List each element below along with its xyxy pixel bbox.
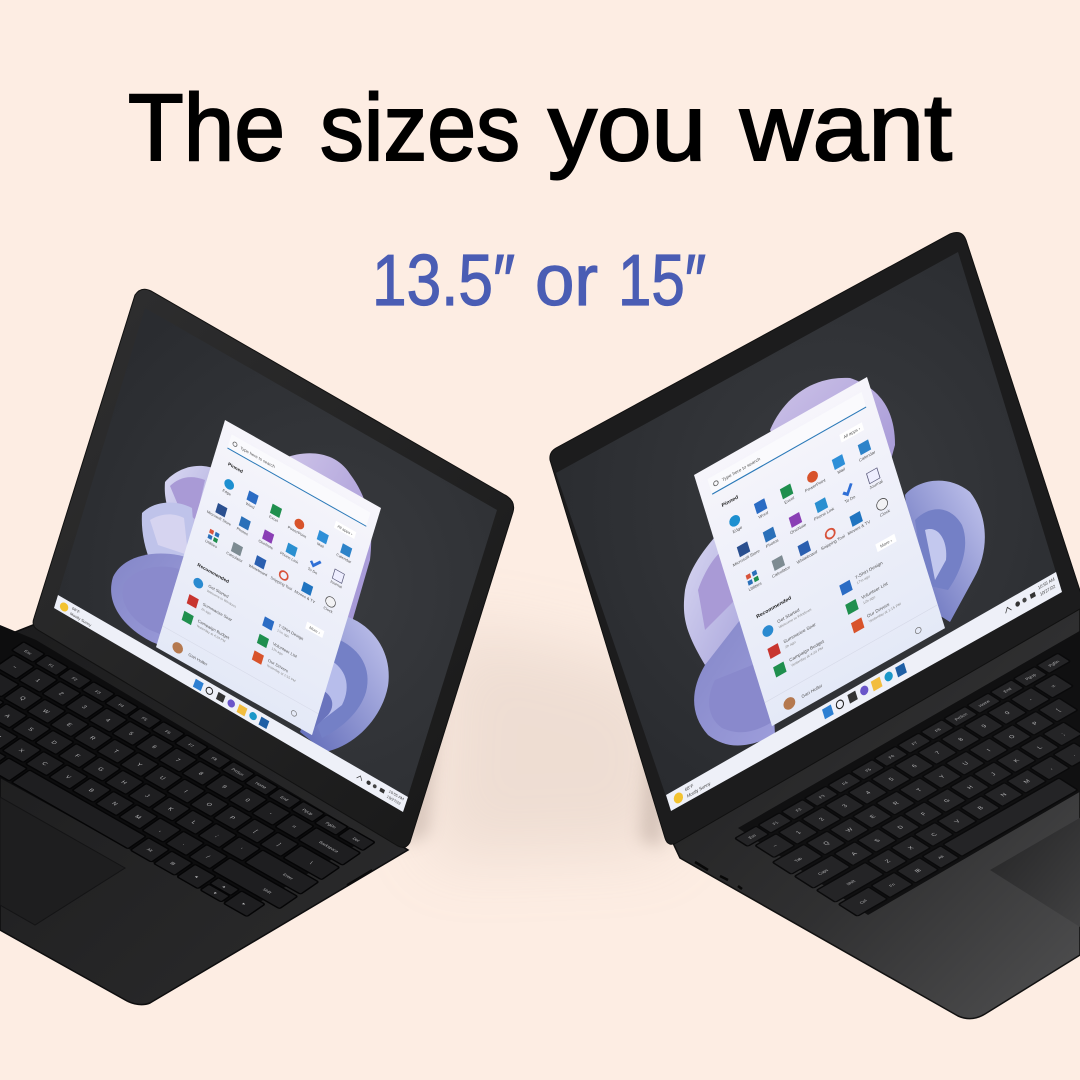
right start menu: Word xyxy=(758,510,769,520)
left keyboard: PgUp xyxy=(301,808,315,816)
right side ports xyxy=(695,862,742,889)
left keyboard: F xyxy=(73,754,81,759)
left keyboard: / xyxy=(204,855,211,860)
right start menu: Movies & TV xyxy=(847,519,871,536)
right keyboard: Shift xyxy=(845,879,857,886)
left keyboard: 6 xyxy=(150,745,158,750)
right start menu: Gari Huller xyxy=(801,683,823,699)
right start menu: 2h ago xyxy=(785,640,796,649)
right keyboard: Alt xyxy=(937,854,946,860)
right keyboard: I xyxy=(986,748,993,752)
left keyboard: ' xyxy=(237,847,243,851)
right keyboard: O xyxy=(1008,734,1017,740)
right start menu: Yesterday at 4:24 PM xyxy=(790,646,824,668)
left keyboard: K xyxy=(166,807,174,812)
right keyboard: 6 xyxy=(911,764,919,769)
right keyboard: F5 xyxy=(864,767,873,773)
left keyboard: Esc xyxy=(23,649,33,655)
right start menu: Welcome to Windows xyxy=(778,607,812,629)
right keyboard: 1 xyxy=(795,831,803,835)
right start menu: Microsoft Store xyxy=(732,548,761,568)
left keyboard: H xyxy=(119,780,128,786)
left keyboard: 5 xyxy=(127,732,134,736)
left keyboard: End xyxy=(279,795,290,802)
right start menu: All apps › xyxy=(843,426,861,440)
right keyboard well xyxy=(738,625,1080,915)
left start menu: Microsoft Store xyxy=(206,509,232,527)
left keyboard: ◄ xyxy=(193,874,200,879)
left start menu: Whiteboard xyxy=(248,563,268,577)
left keyboard: F8 xyxy=(210,756,219,762)
left start menu: Photos xyxy=(236,526,249,537)
right keyboard: Q xyxy=(822,841,832,846)
left start menu: Campaign Budget xyxy=(197,618,231,641)
left trackpad xyxy=(0,797,125,925)
right start menu: Yesterday at 1:15 PM xyxy=(868,602,901,624)
right start menu: Whiteboard xyxy=(796,549,818,565)
right keyboard: D xyxy=(897,825,905,830)
left keyboard: F5 xyxy=(140,716,149,722)
left start menu: Welcome to Windows xyxy=(206,589,237,609)
left start menu: All apps › xyxy=(337,524,354,537)
left start menu: Excel xyxy=(269,514,279,523)
left keyboard: P xyxy=(228,816,236,821)
left keyboard: 1 xyxy=(33,678,41,683)
right deck xyxy=(673,605,1080,1019)
right keyboard: Ctrl xyxy=(858,899,868,905)
left keyboard: , xyxy=(158,829,164,833)
right keyboard: 0 xyxy=(1004,711,1012,716)
left wallpaper flower xyxy=(111,453,389,752)
right keyboard: Home xyxy=(977,699,992,708)
right keyboard: S xyxy=(874,838,882,844)
left keyboard: \ xyxy=(307,861,314,866)
right keyboard: B xyxy=(977,806,985,811)
right keyboard: C xyxy=(930,832,939,838)
title: want xyxy=(739,75,952,181)
right start menu: Recommended xyxy=(756,595,792,620)
left keyboard: S xyxy=(26,727,35,732)
title xyxy=(128,75,952,181)
left keyboard: R xyxy=(88,736,96,741)
left start menu: PowerPoint xyxy=(287,524,308,540)
right keyboard: . xyxy=(1071,753,1077,757)
right keyboard: Tab xyxy=(793,856,804,863)
left side ports xyxy=(347,870,372,885)
right keyboard: 4 xyxy=(865,790,873,795)
right start menu: Pinned xyxy=(721,494,739,509)
left keyboard: ▤ xyxy=(169,861,177,866)
right start menu: PowerPoint xyxy=(804,477,827,493)
subtitle: sizes xyxy=(372,241,706,321)
right start menu: 17m ago xyxy=(856,574,871,585)
right keyboard: L xyxy=(1036,745,1045,750)
left keyboard: 8 xyxy=(197,771,204,776)
left taskbar content: Mostly Sunny xyxy=(69,611,92,628)
left start menu: Calendar xyxy=(336,552,352,565)
left keyboard: PrtScn xyxy=(230,767,246,777)
left start menu: Clock xyxy=(323,605,333,614)
left start menu: Word xyxy=(245,501,255,510)
left keyboard: B xyxy=(87,788,95,793)
right start menu xyxy=(694,377,945,726)
left keyboard: F4 xyxy=(117,703,126,708)
left keyboard: G xyxy=(96,767,105,773)
right keyboard: Esc xyxy=(747,833,757,840)
right start menu: Get Started xyxy=(777,607,800,624)
right keyboard: A xyxy=(851,852,859,857)
title: The xyxy=(128,75,285,181)
right keyboard: F4 xyxy=(841,780,850,786)
right taskbar content: 10/27/22 xyxy=(1039,583,1056,597)
subtitle: sizes: 15″ xyxy=(618,241,706,321)
left keyboard: N xyxy=(110,801,118,807)
right start menu: Excel xyxy=(784,495,795,505)
left keyboard: ▲ xyxy=(221,884,228,889)
left keyboard: E xyxy=(65,723,73,728)
right start menu: More › xyxy=(880,537,893,549)
left start menu: Pinned xyxy=(227,461,243,475)
right keyboard: ; xyxy=(1060,732,1067,737)
left start menu: Utilities xyxy=(205,538,218,549)
right keyboard: F2 xyxy=(794,807,803,812)
left start menu: Snipping Tool xyxy=(270,575,293,592)
left keyboard: X xyxy=(17,748,25,754)
right keyboard: K xyxy=(1013,759,1021,764)
right keyboard: H xyxy=(966,785,975,790)
right start menu: Photos xyxy=(765,538,779,549)
left start menu xyxy=(156,420,381,735)
left keyboard: F7 xyxy=(187,743,196,748)
right keyboard: F7 xyxy=(910,740,919,746)
right taskbar content: 10:55 AM xyxy=(1037,576,1055,591)
right keyboard: 5 xyxy=(888,777,896,782)
right keyboard: F3 xyxy=(818,794,827,799)
right keyboard: PgUp xyxy=(1024,673,1038,681)
right start menu: Journal xyxy=(869,479,883,490)
left keyboard: O xyxy=(204,802,213,808)
left keyboard: Backspace xyxy=(318,840,341,854)
subtitle: sizes: or xyxy=(535,241,598,321)
left start menu: Get Started xyxy=(208,583,230,599)
left keyboard: Home xyxy=(254,781,269,790)
right start menu: Summarize Sear xyxy=(783,622,817,644)
right wallpaper flower xyxy=(684,378,985,746)
left keyboard: 3 xyxy=(80,705,88,710)
right keyboard xyxy=(735,653,1080,916)
left lid xyxy=(33,289,514,847)
left start menu: Phone Link xyxy=(280,550,299,565)
left keyboard: Alt xyxy=(146,847,155,853)
right start menu: Our Drivers xyxy=(866,601,890,619)
right taskbar content: Mostly Sunny xyxy=(686,780,712,799)
left keyboard: - xyxy=(267,812,274,816)
left start menu: Edge xyxy=(222,488,232,497)
left keyboard: C xyxy=(40,761,48,767)
right keyboard: U xyxy=(962,761,970,766)
right keyboard: PgDn xyxy=(1047,659,1061,668)
right keyboard: Caps xyxy=(817,868,829,876)
left start menu: Mail xyxy=(316,541,325,549)
left keyboard: T xyxy=(111,749,120,755)
left keyboard: F6 xyxy=(164,729,173,735)
right keyboard: X xyxy=(907,846,916,851)
left keyboard: 4 xyxy=(103,718,112,724)
title: you xyxy=(548,75,706,181)
left start menu: Recommended xyxy=(197,562,230,585)
right keyboard: V xyxy=(954,819,962,824)
left keyboard: Enter xyxy=(282,872,295,881)
right start menu: To Do xyxy=(844,494,856,504)
right keyboard: 8 xyxy=(958,737,965,742)
left keyboard: U xyxy=(158,776,166,781)
right start menu: Clock xyxy=(879,507,891,518)
right keyboard: F8 xyxy=(934,727,943,733)
left start menu: Summarize Sear xyxy=(202,602,233,623)
left keyboard: ~ xyxy=(10,665,18,670)
right start menu: 12h ago xyxy=(863,595,876,605)
right keyboard: N xyxy=(1000,792,1009,798)
left keyboard: A xyxy=(3,714,11,719)
right trackpad xyxy=(990,812,1080,935)
left start menu: 12h ago xyxy=(271,647,283,656)
left keyboard: M xyxy=(133,815,142,820)
right keyboard: 2 xyxy=(818,817,826,822)
left keyboard: ] xyxy=(275,843,282,847)
right lid xyxy=(550,232,1080,844)
soft shadow between laptops xyxy=(402,620,680,860)
right keyboard: End xyxy=(1002,687,1013,693)
right start menu: Type here to search xyxy=(721,456,761,482)
left keyboard: 2 xyxy=(57,692,64,697)
left keyboard well xyxy=(0,600,368,912)
left keyboard: W xyxy=(41,709,51,715)
right keyboard: = xyxy=(1050,684,1059,689)
left keyboard: 0 xyxy=(243,798,251,803)
right keyboard: W xyxy=(845,827,855,833)
left start menu: Our Drivers xyxy=(267,658,289,673)
right keyboard: Y xyxy=(939,774,947,780)
left keyboard: Shift xyxy=(261,887,274,895)
left keyboard: = xyxy=(290,825,298,830)
right start menu: Edge xyxy=(732,524,743,534)
left keyboard: [ xyxy=(252,830,259,834)
left start menu: 17m ago xyxy=(277,628,290,639)
right keyboard: E xyxy=(869,814,878,820)
right taskbar xyxy=(666,572,1062,811)
left keyboard: F2 xyxy=(70,676,79,682)
right start menu: Calculator xyxy=(771,564,791,579)
right keyboard: Z xyxy=(884,859,893,864)
right keyboard: 3 xyxy=(842,804,849,809)
right laptop 15 inch xyxy=(550,232,1080,1019)
left start menu: OneNote xyxy=(258,538,274,551)
left keyboard: PgDn xyxy=(324,821,338,829)
right start menu: Volunteer List xyxy=(861,581,889,600)
left start menu: To Do xyxy=(307,566,318,576)
right keyboard: T xyxy=(916,788,924,793)
left keyboard: 7 xyxy=(173,758,181,763)
left keyboard: ; xyxy=(214,834,220,838)
right start menu: Phone Link xyxy=(813,506,835,522)
left start menu: Gari Huller xyxy=(188,652,208,667)
left screen xyxy=(54,308,497,812)
right keyboard: F xyxy=(920,812,929,817)
left start menu: Movies & TV xyxy=(294,589,316,605)
left start menu: Type here to search xyxy=(240,445,276,470)
left start menu: Yesterday at 4:24 PM xyxy=(196,624,226,644)
left taskbar content xyxy=(59,599,405,807)
left start menu: 2h ago xyxy=(201,607,211,616)
right keyboard: G xyxy=(943,798,952,804)
right keyboard: ⊞ xyxy=(914,868,923,874)
left start menu: More › xyxy=(309,625,321,635)
left keyboard: Y xyxy=(135,762,143,768)
left laptop 13.5 inch xyxy=(0,289,514,1005)
right keyboard: Fn xyxy=(888,882,897,888)
left keyboard: F1 xyxy=(47,663,56,668)
title: sizes xyxy=(320,75,520,181)
left deck xyxy=(0,625,408,1005)
right keyboard: F1 xyxy=(771,820,780,826)
right start menu: Mail xyxy=(837,466,846,475)
right keyboard: 9 xyxy=(981,724,989,729)
right start menu: Utilities xyxy=(748,581,762,592)
left keyboard: V xyxy=(63,775,72,780)
right start menu: Snipping Tool xyxy=(820,533,846,551)
right keyboard: P xyxy=(1032,721,1040,726)
right keyboard: ~ xyxy=(772,843,780,849)
right start menu: T-Shirt Design xyxy=(854,560,884,580)
left keyboard: Q xyxy=(18,696,27,702)
right taskbar content: 68°F xyxy=(684,783,694,792)
left taskbar xyxy=(54,595,408,812)
left keyboard: J xyxy=(143,794,151,799)
left start menu: Calculator xyxy=(226,550,244,564)
right keyboard: PrtScn xyxy=(953,712,969,721)
right keyboard: 7 xyxy=(934,751,942,756)
right keyboard: F6 xyxy=(887,754,896,759)
right keyboard: J xyxy=(990,772,998,777)
left start menu: Volunteer List xyxy=(272,641,298,659)
right start menu: Campaign Budget xyxy=(789,638,825,663)
left keyboard xyxy=(0,642,376,923)
right keyboard: , xyxy=(1048,766,1054,771)
left keyboard: . xyxy=(181,842,187,846)
left keyboard: F3 xyxy=(94,689,103,695)
left keyboard: 9 xyxy=(220,785,228,790)
left start menu: Yesterday at 1:15 PM xyxy=(266,663,296,683)
right screen xyxy=(556,252,1062,811)
left taskbar content: 10/27/22 xyxy=(386,794,401,806)
left keyboard: Del xyxy=(351,836,361,842)
left taskbar content: 10:55 AM xyxy=(388,789,405,802)
left taskbar content: 68°F xyxy=(71,606,81,615)
right keyboard: R xyxy=(892,801,901,806)
left start menu: Journal xyxy=(329,578,343,590)
subtitle: sizes: 13.5″ xyxy=(372,241,515,321)
right start menu: OneNote xyxy=(790,522,807,535)
left keyboard: D xyxy=(49,740,58,746)
right keyboard: M xyxy=(1023,779,1032,785)
left keyboard: L xyxy=(190,820,197,825)
left keyboard: I xyxy=(182,790,189,794)
right keyboard: [ xyxy=(1056,708,1062,713)
right start menu: Calendar xyxy=(858,449,876,463)
left keyboard: ▼ xyxy=(211,891,219,895)
right taskbar content xyxy=(672,576,1057,806)
left start menu: T-Shirt Design xyxy=(278,623,305,642)
right keyboard: - xyxy=(1028,698,1035,702)
left keyboard: ► xyxy=(240,901,248,906)
